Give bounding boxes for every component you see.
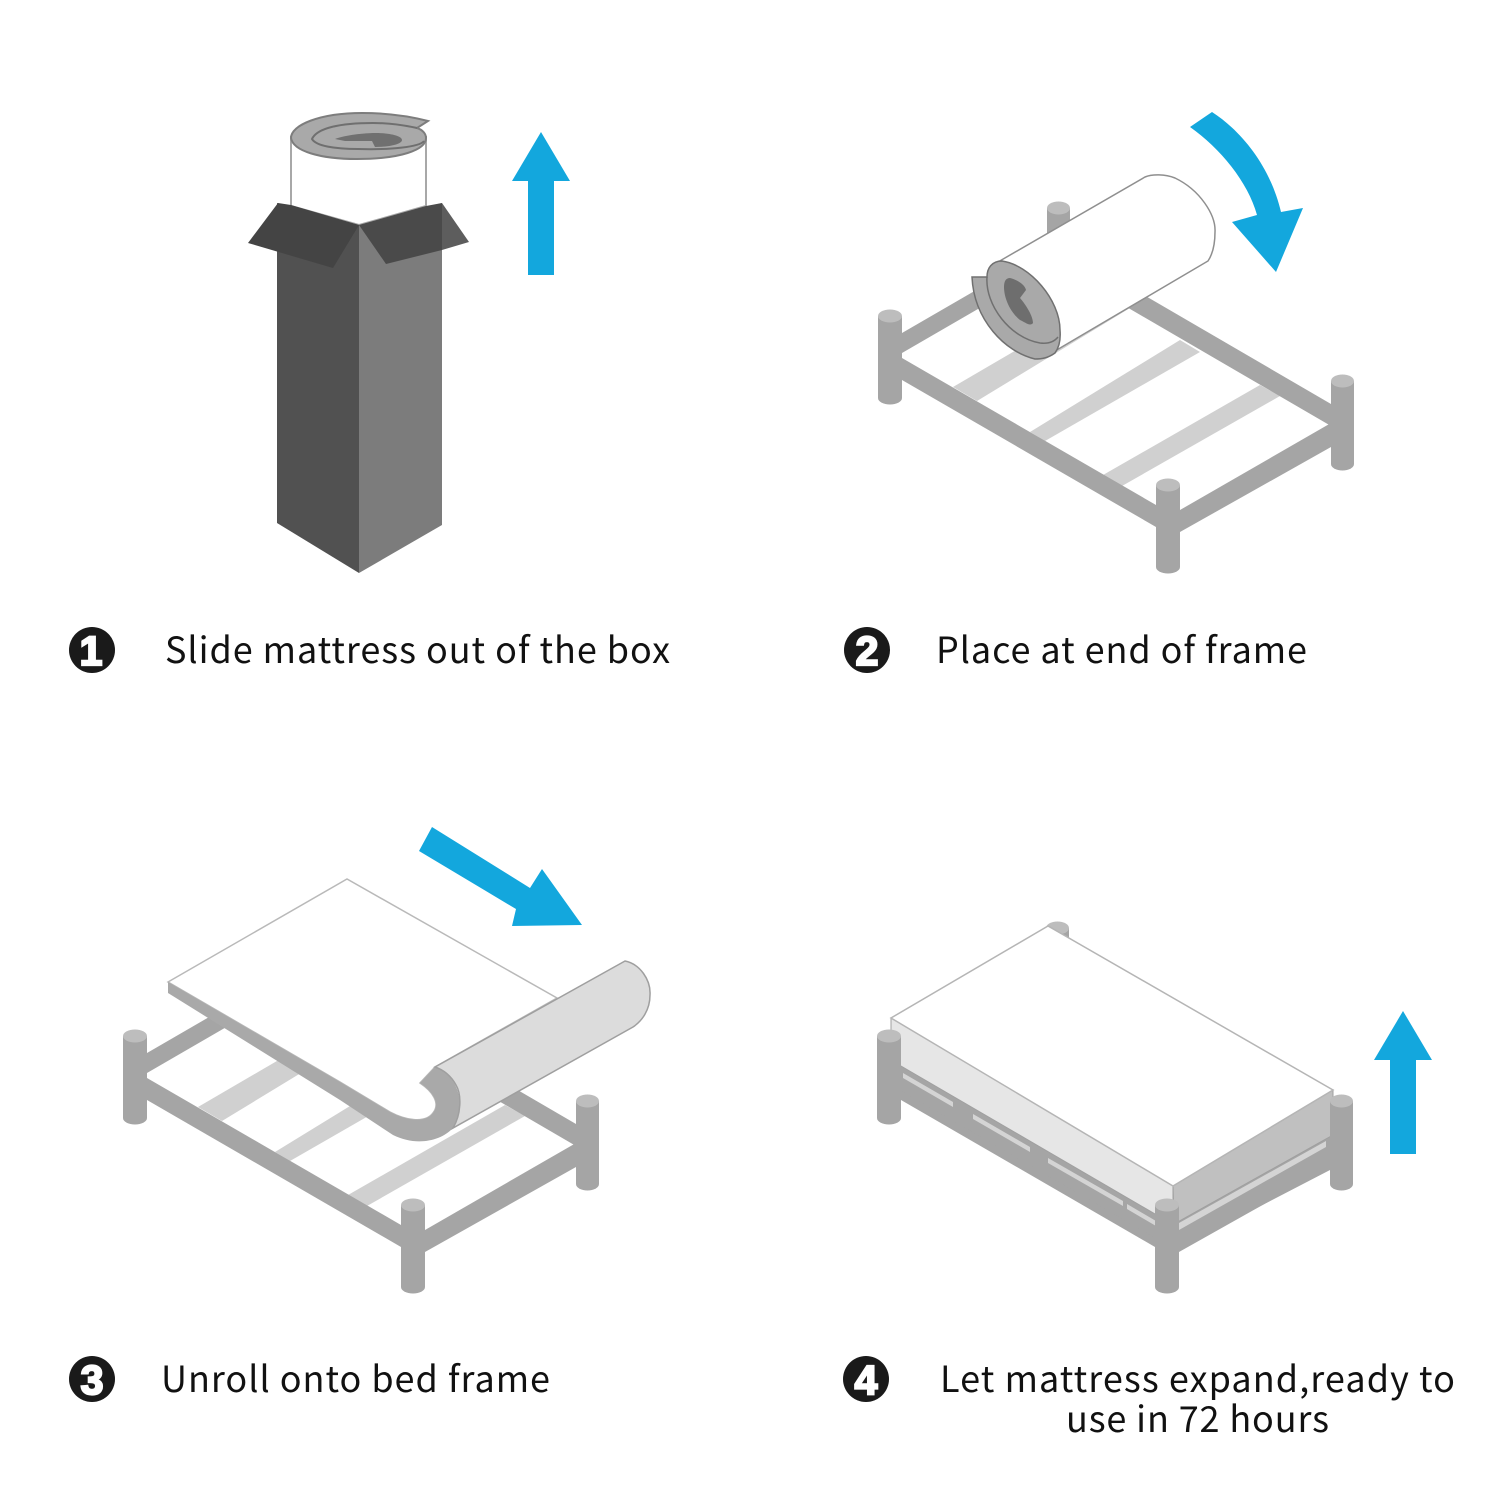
caption 4: use in 72 hours bbox=[1066, 1391, 1329, 1443]
number badge 3 bbox=[69, 1356, 115, 1403]
caption 4 bbox=[940, 1351, 1455, 1443]
step 3 label bbox=[69, 1351, 550, 1403]
mattress flat top bbox=[168, 879, 557, 1120]
back leg of frame bbox=[1046, 922, 1069, 990]
box right flap bbox=[359, 203, 442, 264]
panel: step 2 illustration, rolled mattress at end of frame bbox=[878, 175, 1354, 573]
box right face bbox=[359, 203, 442, 573]
rolled mattress cylinder bbox=[998, 175, 1215, 351]
mattress left side bbox=[891, 1018, 1174, 1225]
caption 2: Place at end of frame bbox=[936, 622, 1307, 674]
arrow: step 3 diagonal bbox=[419, 827, 582, 926]
frame legs bbox=[123, 1030, 599, 1294]
caption 4: Let mattress expand,ready to bbox=[940, 1351, 1455, 1403]
mattress roll spiral top bbox=[291, 113, 428, 159]
step 1 label bbox=[69, 622, 670, 674]
frame legs bbox=[878, 310, 1354, 574]
box right flap outer tip bbox=[442, 203, 469, 250]
slat edges below mattress bbox=[903, 1073, 1326, 1230]
number badge 4 bbox=[843, 1356, 889, 1403]
arrow: step 1 up bbox=[512, 132, 570, 275]
box left flap bbox=[248, 203, 359, 268]
bed frame rails bbox=[901, 969, 1330, 1252]
number badge 3: 3 bbox=[81, 1357, 103, 1403]
panel: step 3 illustration, unrolling onto bed frame bbox=[123, 879, 650, 1294]
panel: step 4 illustration, mattress expanded on frame bbox=[877, 922, 1353, 1294]
number badge 2: 2 bbox=[856, 628, 878, 674]
roll face bbox=[435, 961, 650, 1128]
bed frame rails and slats bbox=[147, 969, 576, 1252]
arrow: step 2 curved down bbox=[1190, 112, 1303, 272]
back leg of frame bbox=[1047, 202, 1070, 270]
step 4 label bbox=[843, 1351, 1455, 1443]
number badge 1: 1 bbox=[80, 628, 102, 674]
mattress thickness band and curl bbox=[168, 982, 460, 1141]
step 2 label bbox=[844, 622, 1307, 674]
mattress top bbox=[891, 926, 1333, 1186]
box left face bbox=[277, 203, 359, 573]
bed frame rails and slats bbox=[902, 249, 1331, 532]
mattress right side bbox=[1173, 1090, 1333, 1224]
rolled mattress body bbox=[291, 137, 426, 225]
number badge 1 bbox=[69, 627, 115, 674]
frame legs bbox=[877, 1030, 1353, 1294]
mattress roll spiral end bbox=[972, 261, 1060, 359]
number badge 2 bbox=[844, 627, 890, 674]
under-mattress rail fill bbox=[900, 1060, 1330, 1250]
number badge 4: 4 bbox=[855, 1357, 878, 1403]
arrow: step 4 up bbox=[1374, 1011, 1432, 1154]
caption 1: Slide mattress out of the box bbox=[165, 622, 670, 674]
caption 3: Unroll onto bed frame bbox=[161, 1351, 550, 1403]
panel: step 1 illustration, mattress sliding out of box bbox=[248, 113, 469, 573]
